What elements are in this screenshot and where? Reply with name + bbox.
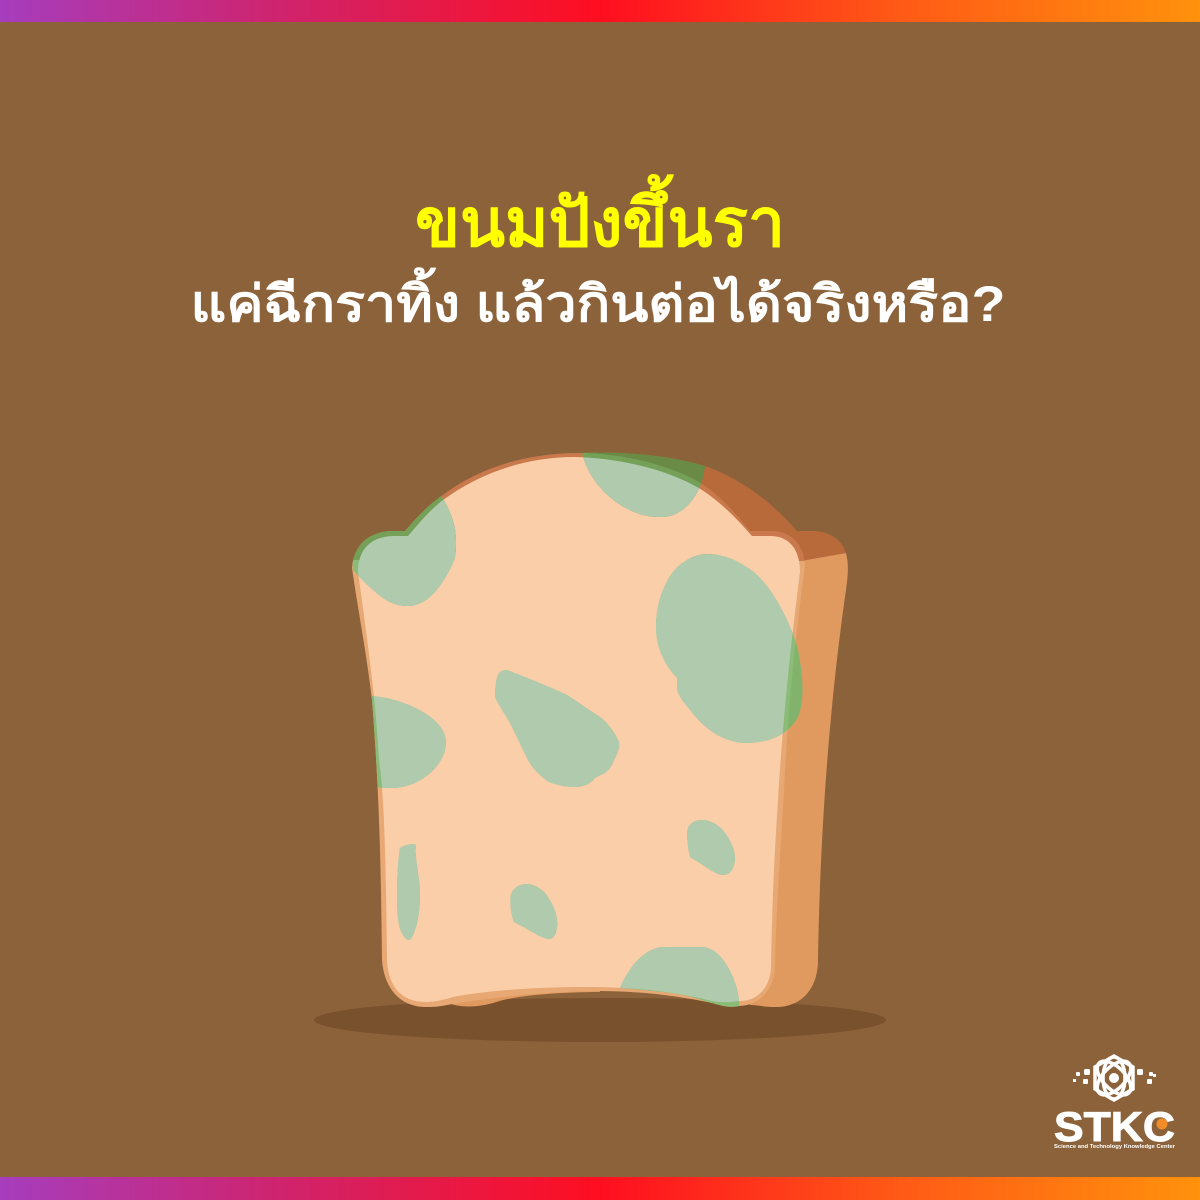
mold over front crust [353,451,803,1008]
top gradient bar [0,0,1200,22]
logo orange dot [1156,1118,1168,1130]
subtitle question: แค่ฉีกราทิ้ง แล้วกินต่อได้จริงหรือ? [190,267,1006,332]
ground shadow [314,998,886,1042]
bread bottom back crust [445,980,600,1006]
illustration: moldy bread slice [352,451,848,1008]
logo: STKC [1054,1055,1176,1150]
bread front face [358,457,800,1002]
mold over top back crust [582,452,705,502]
mold patches on bread face [353,451,803,1008]
bread top back crust [580,453,846,561]
title: moldy bread: ขนมปังขึ้นรา [415,173,785,261]
bread front crust [352,453,805,1007]
mold over upper front crust [353,453,734,560]
bottom gradient bar [0,1177,1200,1200]
logo wordmark: STKC [1054,1103,1175,1150]
bread side crust [700,553,848,1007]
logo tagline: Science and Technology Knowledge Center [1054,1144,1176,1150]
mold over side crust [714,630,802,999]
icon: atom emblem [1073,1055,1156,1101]
